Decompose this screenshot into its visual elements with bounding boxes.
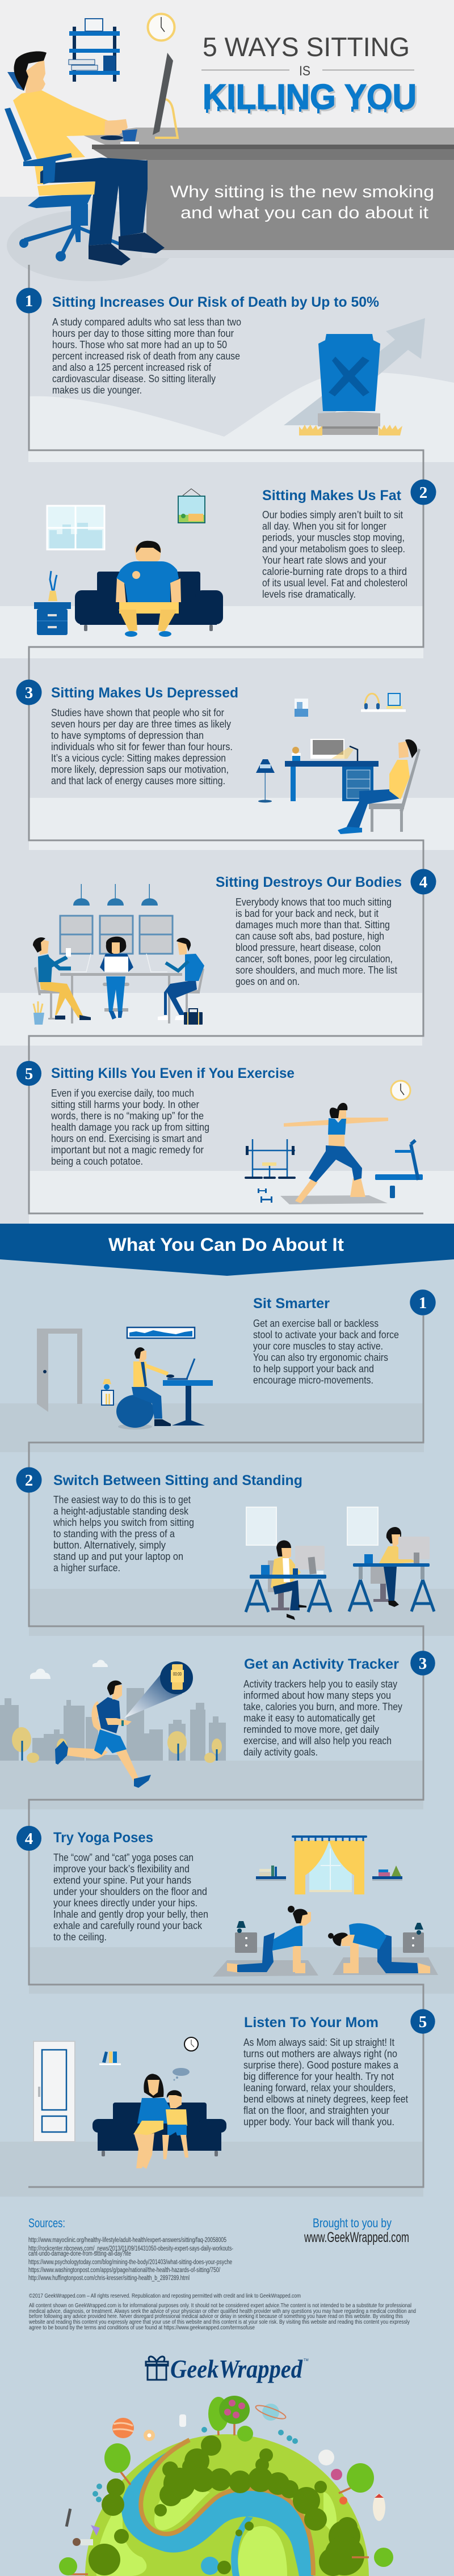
icon: trees	[12, 1727, 222, 1763]
icon: curtained window	[292, 1835, 367, 1894]
body text: makes us die younger.	[52, 384, 142, 396]
body text: and your metabolism goes to sleep.	[262, 543, 405, 555]
illustration: man talking	[158, 938, 204, 1020]
badge 4	[411, 869, 436, 895]
icon: tracker zoom: 00:00	[173, 1672, 182, 1677]
heading: Get an Activity Tracker	[244, 1656, 399, 1672]
body text: button. Alternatively, simply	[53, 1539, 166, 1551]
body text: A study compared adults who sat less than two	[52, 316, 241, 328]
illustration: office table and laptops	[60, 954, 182, 1023]
body text: Activity trackers help you to easily stay	[243, 1678, 397, 1690]
body text: words, there is no “making up” for the	[51, 1110, 204, 1122]
heading: Sitting Destroys Our Bodies	[216, 874, 402, 890]
icon: skyline picture	[127, 1327, 195, 1338]
body text: Even if you exercise daily, too much	[51, 1088, 194, 1099]
badge 3	[16, 679, 42, 705]
title	[201, 32, 418, 119]
icon: tracker zoom	[124, 1661, 193, 1718]
body text: stand up and put your laptop on	[53, 1551, 183, 1562]
sources: http://rockcenter.nbcnews.com/_news/2013/01/09/16431050-obesity-expert-says-daily-workouts-	[28, 2245, 233, 2252]
body text: turns out mothers are always right (no	[243, 2048, 397, 2059]
icon: tombstone	[299, 334, 402, 435]
body text: important but not a magic remedy for	[51, 1144, 204, 1156]
title: 5 WAYS SITTING	[203, 32, 410, 62]
stream and pond	[201, 2516, 253, 2576]
panel: even if you exercise	[16, 1061, 423, 1204]
brought to you by	[304, 2216, 409, 2245]
icon: side table	[34, 571, 71, 635]
body text: damages much more than that. Sitting	[236, 919, 390, 930]
illustration: yoga woman	[280, 1103, 388, 1204]
illustration: man with coffee	[33, 937, 91, 1020]
body text: hours on end. Exercising is smart and	[51, 1133, 202, 1144]
heading: Sitting Makes Us Fat	[262, 488, 402, 504]
body text: You can also try ergonomic chairs	[253, 1352, 388, 1363]
body text: more likely, depression saps our motivation,	[51, 764, 229, 775]
illustration: desk	[285, 739, 379, 801]
body text: of its usual level. Fat and cholesterol	[262, 577, 407, 589]
badge 3: 3	[25, 684, 33, 702]
icon: briefcase	[184, 1009, 203, 1025]
body text: individuals who sit for fewer than four hours.	[51, 741, 233, 752]
body text: upper body. Your back will thank you.	[243, 2116, 394, 2127]
forest	[89, 2435, 364, 2576]
illustration: green planet	[59, 2396, 393, 2576]
body text	[262, 509, 407, 600]
badge 5: 5	[25, 1065, 33, 1083]
sources: https://www.psychologytoday.com/blog/mining-the-body/201403/what-sitting-does-your-psyche	[28, 2259, 232, 2266]
body text: a height-adjustable standing desk	[53, 1505, 189, 1517]
icon: treadmill	[375, 1140, 423, 1180]
badge 2	[411, 480, 436, 505]
body text: hours. Those who sat more had an up to 50	[52, 339, 227, 350]
icon: wall shelf	[69, 19, 120, 82]
panel: makes us depressed	[16, 679, 421, 834]
body text	[52, 316, 241, 396]
body text: exhale and carefully round your back	[53, 1920, 203, 1931]
body text: to standing with the press of a	[53, 1528, 175, 1539]
illustration: cow pose	[227, 1906, 311, 1973]
body text: sore shoulders, and much more. The list	[236, 965, 397, 976]
planet body	[85, 2434, 369, 2576]
body text: your knees directly under your hips.	[53, 1897, 197, 1909]
body text	[53, 1852, 208, 1943]
body text: Our bodies simply aren’t built to sit	[262, 509, 403, 521]
banner: what you can do	[0, 1224, 454, 1276]
body text: hours per day to those sitting more than four	[52, 328, 234, 339]
copyright and disclaimer	[28, 2292, 416, 2331]
body text: sitting still harms your body. In other	[51, 1099, 199, 1110]
badge 5: 5	[419, 2013, 427, 2031]
panel: makes us fat	[34, 480, 436, 637]
body text: levels rise dramatically.	[262, 589, 356, 600]
title: KILLING YOU	[204, 79, 418, 119]
sources: cant-undo-damage-done-from-sitting-all-day?lite	[28, 2251, 131, 2257]
body text: The “cow” and “cat” yoga poses can	[53, 1852, 194, 1863]
body text	[53, 1494, 194, 1573]
panel: listen to your mom	[33, 2009, 435, 2169]
body text: your core muscles to stay active.	[253, 1340, 383, 1352]
badge 4	[16, 1826, 41, 1851]
body text: Inhale and gently drop your belly, then	[53, 1909, 208, 1920]
badge 2: 2	[419, 484, 427, 502]
body text: Everybody knows that too much sitting	[236, 896, 392, 908]
icon: clock	[391, 1081, 410, 1100]
body text	[236, 896, 397, 987]
body text: which helps you switch from sitting	[53, 1517, 194, 1528]
body text: take, calories you burn, and more. They	[243, 1701, 402, 1712]
heading: Sitting Increases Our Risk of Death by Up to 50%	[52, 294, 379, 310]
body text: daily activity goals.	[243, 1746, 318, 1758]
body text: to help support your back and	[253, 1363, 374, 1374]
illustration: standing desk	[347, 1507, 434, 1611]
illustration: man on couch	[75, 541, 223, 637]
body text: to the ceiling.	[53, 1931, 107, 1943]
badge 1	[16, 288, 42, 313]
title: IS	[299, 64, 310, 79]
body text: exercise, and will also help you reach	[243, 1735, 392, 1746]
badge 3	[410, 1651, 435, 1676]
body text: improve your back’s flexibility and	[53, 1863, 190, 1875]
icon: yoga mats	[213, 1957, 438, 1977]
illustration: mom and son on couch	[93, 2074, 226, 2169]
sources: https://www.washingtonpost.com/apps/g/page/national/the-health-hazards-of-sitting/750/	[28, 2267, 221, 2274]
space objects	[65, 2403, 385, 2546]
badge 2	[16, 1467, 42, 1492]
icon: side table with lamp	[102, 1379, 114, 1405]
body text: being a couch potatoe.	[51, 1156, 143, 1167]
badge 5	[16, 1061, 41, 1086]
icon: office windows	[60, 916, 173, 954]
body text: a higher surface.	[53, 1562, 120, 1573]
body text: extend your spine. Put your hands	[53, 1875, 191, 1886]
body text	[243, 1678, 402, 1758]
badge 1: 1	[419, 1294, 427, 1312]
badge 3: 3	[419, 1655, 427, 1673]
illustration: man on exercise ball	[116, 1347, 213, 1429]
badge 4: 4	[25, 1830, 33, 1848]
body text: stool to activate your back and force	[253, 1329, 399, 1340]
header desk	[7, 128, 454, 281]
heading: Sitting Kills You Even if You Exercise	[51, 1065, 295, 1081]
icon: window	[47, 506, 104, 549]
panel: risk of death	[16, 288, 425, 435]
body text: periods, your muscles stop moving,	[262, 532, 405, 543]
heading: Sit Smarter	[253, 1296, 330, 1312]
body text: goes on and on.	[236, 976, 300, 987]
body text: calorie-burning rate drops to a third	[262, 566, 407, 577]
heading: Listen To Your Mom	[244, 2015, 379, 2031]
body text: flat on the floor, and straighten your	[243, 2105, 389, 2116]
body text: make it easy to automatically get	[243, 1712, 375, 1724]
badge 1	[410, 1289, 436, 1316]
body text: seven hours per day are three times as likely	[51, 718, 231, 730]
body text	[253, 1318, 399, 1386]
body text: It’s a vicious cycle: Sitting makes depression	[51, 752, 226, 764]
logo: GeekWrapped	[170, 2354, 303, 2383]
body text: cancer, soft bones, poor leg circulation,	[236, 953, 393, 965]
body text: is bad for your back and neck, but it	[236, 908, 379, 919]
body text: all day. When you sit for longer	[262, 521, 386, 532]
connector line bottom	[28, 1316, 423, 2187]
icon: bookshelf	[99, 2052, 121, 2065]
body text: and also a 125 percent increased risk of	[52, 362, 212, 373]
logo: TM	[304, 2359, 309, 2362]
body text: Get an exercise ball or backless	[253, 1318, 379, 1329]
body text: The easiest way to do this is to get	[53, 1494, 191, 1505]
icon: nightstands	[235, 1921, 424, 1953]
icon: wall shelves	[256, 1866, 402, 1881]
illustration: city skyline	[0, 1688, 226, 1761]
title: KILLING YOU	[203, 78, 417, 117]
panel: sit smarter	[37, 1289, 436, 1429]
heading: Switch Between Sitting and Standing	[53, 1473, 302, 1488]
icon: monitor	[153, 53, 178, 138]
icon: shelf with headphones	[361, 693, 406, 712]
illustration: man at desk	[5, 52, 165, 265]
subtitle: Why sitting is the new smoking	[170, 183, 434, 201]
icon: mug and keyboard	[100, 129, 139, 144]
body text	[243, 2037, 408, 2127]
panel: sitting and standing	[16, 1467, 434, 1620]
badge 1: 1	[25, 292, 33, 310]
icon: wall clock	[148, 14, 175, 41]
trees	[59, 2396, 393, 2575]
body text: to have symptoms of depression than	[51, 730, 204, 741]
body text: Studies have shown that people who sit for	[51, 707, 224, 718]
body text: health damage you rack up from sitting	[51, 1122, 209, 1133]
body text: As Mom always said: Sit up straight! It	[243, 2037, 394, 2048]
icon: floor lamp	[256, 759, 275, 803]
illustration: man leaning back	[338, 739, 421, 834]
icon: pen cup	[33, 1001, 44, 1025]
panel: yoga poses	[16, 1826, 438, 1977]
illustration: runner	[55, 1681, 151, 1788]
body text: encourage micro-movements.	[253, 1374, 373, 1386]
banner: what you can do: What You Can Do About It	[108, 1234, 344, 1255]
brought to you by: Brought to you by	[313, 2216, 392, 2230]
badge 4: 4	[419, 873, 427, 891]
body text	[51, 707, 233, 786]
body text	[51, 1088, 209, 1167]
body text: Your heart rate slows and your	[262, 555, 386, 566]
icon: clock	[184, 2037, 198, 2051]
icon: ceiling lamps	[73, 884, 158, 906]
subtitle: and what you can do about it	[180, 204, 429, 222]
sources: Sources:	[28, 2216, 65, 2230]
body text: big difference for your health. Try not	[243, 2071, 394, 2082]
copyright and disclaimer: ©2017 GeekWrapped.com – All rights reserved. Republication and reposting permitted with credit and link to GeekWrapped.com	[29, 2292, 301, 2299]
badge 2: 2	[25, 1471, 33, 1490]
icon: thought cloud	[173, 2068, 190, 2081]
icon: rising arrow	[284, 318, 425, 425]
sources: http://www.huffingtonpost.com/chris-kresser/sitting-health_b_2897289.html	[28, 2275, 190, 2282]
body text: informed about how many steps you	[243, 1690, 391, 1701]
icon: open door	[37, 1329, 82, 1412]
illustration: woman with laptop	[100, 937, 133, 1020]
body text: and that lack of energy causes more sitting.	[51, 775, 225, 786]
illustration: cat pose	[328, 1923, 430, 1973]
body text: percent increased risk of death from any cause	[52, 350, 240, 362]
icon: wall picture	[178, 489, 205, 523]
sources: http://www.mayoclinic.org/healthy-lifestyle/adult-health/expert-answers/sitting/faq-20058005	[28, 2237, 226, 2244]
panel: activity tracker	[0, 1651, 435, 1788]
heading: Sitting Makes Us Depressed	[51, 685, 238, 701]
body text: can cause soft abs, bad posture, high	[236, 930, 384, 942]
body text: leaning forward, relax your shoulders,	[243, 2082, 396, 2093]
light meadows	[96, 2487, 337, 2576]
connector line top	[29, 265, 423, 1213]
body text: bend elbows at ninety degrees, keep feet	[243, 2093, 408, 2105]
icon: wall art	[295, 699, 308, 717]
icon: clouds	[30, 1660, 108, 1679]
body text: blood pressure, heart disease, colon	[236, 942, 381, 953]
body text: surprise there). Good posture makes a	[243, 2059, 399, 2071]
icon: weight rack	[246, 1139, 295, 1178]
body text: cardiovascular disease. So sitting literally	[52, 373, 216, 384]
badge 5	[410, 2009, 435, 2034]
panel: destroys our bodies	[33, 869, 436, 1025]
icon: door	[33, 2041, 75, 2142]
copyright and disclaimer: agree to be bound by the terms and conditions of use found at https://www.geekwrapped.com/termsofuse	[29, 2324, 255, 2331]
icon: dumbbells and bottle	[258, 1186, 395, 1203]
body text: reminded to move more, get daily	[243, 1724, 379, 1735]
heading: Try Yoga Poses	[53, 1830, 153, 1846]
illustration: sitting desk	[246, 1507, 331, 1620]
sources	[28, 2216, 233, 2282]
subtitle	[170, 183, 434, 222]
body text: under your shoulders on the floor and	[53, 1886, 207, 1897]
river	[121, 2440, 313, 2576]
flowers	[93, 2427, 298, 2502]
